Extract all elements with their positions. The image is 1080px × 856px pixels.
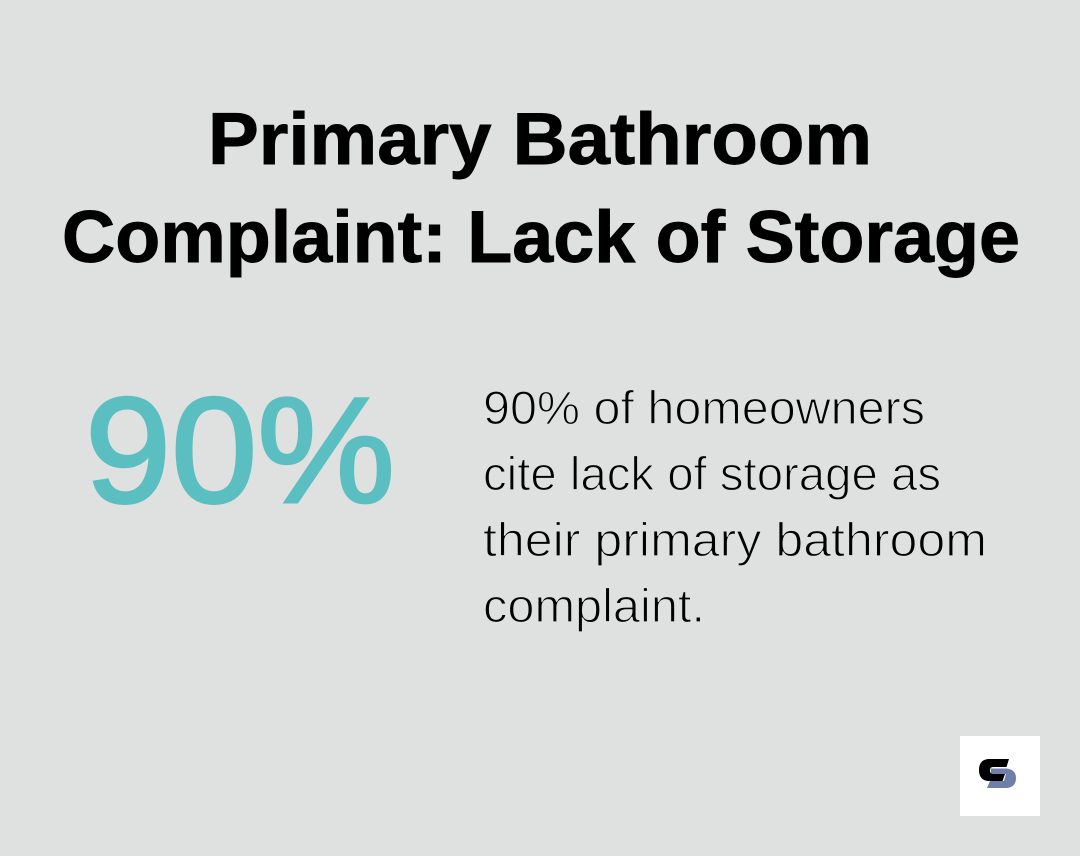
description text: complaint.	[483, 579, 705, 632]
title: Primary Bathroom	[208, 99, 872, 180]
description text: their primary bathroom	[483, 513, 987, 566]
icon: logo mark	[979, 759, 1016, 788]
statistic: 90%: 90%	[85, 366, 395, 534]
description text: cite lack of storage as	[483, 447, 941, 500]
description text	[483, 381, 987, 632]
logo badge	[960, 736, 1040, 816]
title	[62, 99, 1020, 278]
description text: 90% of homeowners	[483, 381, 925, 434]
title: Complaint: Lack of Storage	[62, 197, 1020, 278]
